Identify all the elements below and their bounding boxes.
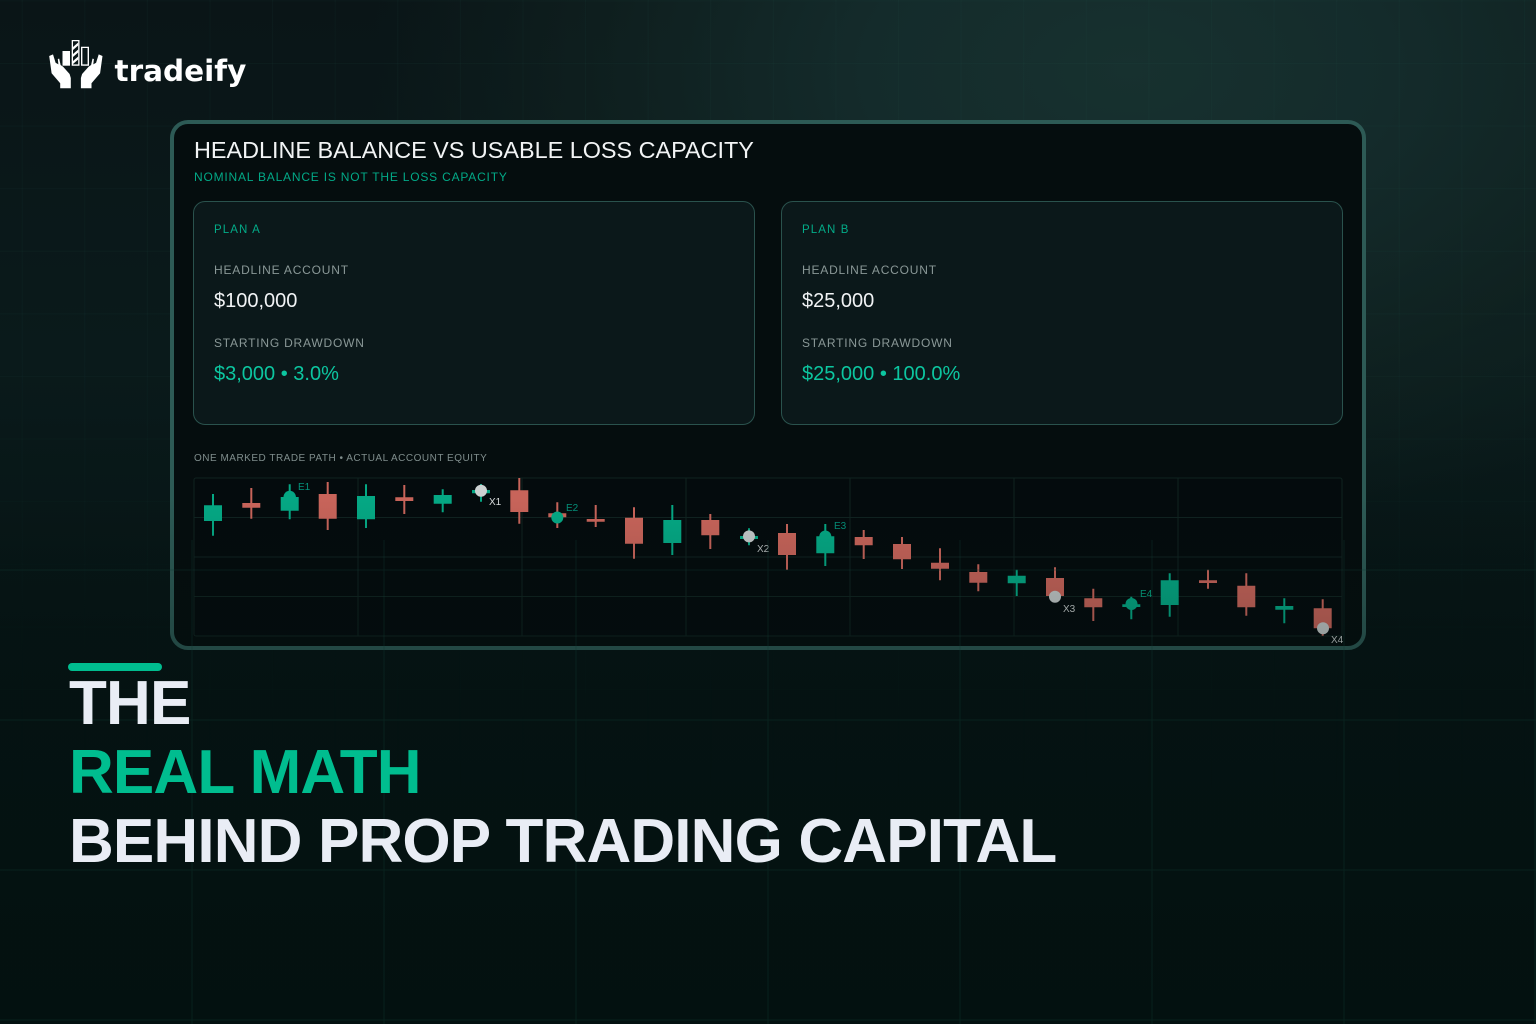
card: plan A — [193, 201, 755, 425]
plan B starting drawdown value: $25,000 • 100.0% — [802, 363, 960, 385]
exit marker X3 — [1049, 591, 1076, 615]
entry marker E4: E4 — [1140, 589, 1153, 600]
exit marker X2: X2 — [757, 544, 770, 555]
candlestick chart — [194, 478, 1344, 646]
title line: BEHIND PROP TRADING CAPITAL: BEHIND PROP TRADING CAPITAL — [69, 807, 1056, 876]
plan B starting drawdown label: STARTING DRAWDOWN — [802, 336, 953, 350]
panel: headline balance vs usable loss capacity — [170, 120, 1366, 650]
plan B label: PLAN B — [802, 224, 850, 236]
icon: hands holding bars — [49, 40, 102, 88]
plan A starting drawdown label: STARTING DRAWDOWN — [214, 336, 365, 350]
exit marker X4: X4 — [1331, 635, 1344, 646]
plan A starting drawdown value: $3,000 • 3.0% — [214, 363, 339, 385]
accent bar — [68, 663, 162, 671]
entry marker E3 — [819, 521, 847, 542]
entry marker E4 — [1126, 589, 1153, 610]
exit marker X1: X1 — [489, 497, 502, 508]
entry marker E3: E3 — [834, 521, 847, 532]
exit marker X3: X3 — [1063, 604, 1076, 615]
exit marker X1 — [475, 485, 502, 508]
plan B headline account label: HEADLINE ACCOUNT — [802, 263, 937, 277]
title — [69, 669, 1056, 876]
lower fade and large background grid — [0, 523, 1536, 1024]
card: plan B — [781, 201, 1343, 425]
green candles — [204, 484, 1293, 623]
plan B headline account value: $25,000 — [802, 290, 874, 312]
panel subheading: NOMINAL BALANCE IS NOT THE LOSS CAPACITY — [194, 170, 508, 184]
exit marker X4 — [1317, 622, 1344, 646]
plan A label: PLAN A — [214, 224, 261, 236]
entry marker E2: E2 — [566, 503, 579, 514]
logo: tradeify — [49, 40, 246, 88]
wordmark: tradeify — [114, 54, 246, 88]
exit marker X2 — [743, 530, 770, 555]
entry marker E1 — [284, 482, 311, 503]
plan A headline account value: $100,000 — [214, 290, 297, 312]
title line: REAL MATH: REAL MATH — [69, 738, 421, 807]
panel heading: HEADLINE BALANCE VS USABLE LOSS CAPACITY — [194, 137, 754, 163]
chart caption: ONE MARKED TRADE PATH • ACTUAL ACCOUNT EQUITY — [194, 453, 487, 464]
plan A headline account label: HEADLINE ACCOUNT — [214, 263, 349, 277]
red candles — [242, 478, 1332, 636]
background fine grid — [22, 0, 1525, 376]
entry marker E2 — [551, 503, 579, 524]
title line: THE: THE — [69, 669, 190, 738]
entry marker E1: E1 — [298, 482, 311, 493]
